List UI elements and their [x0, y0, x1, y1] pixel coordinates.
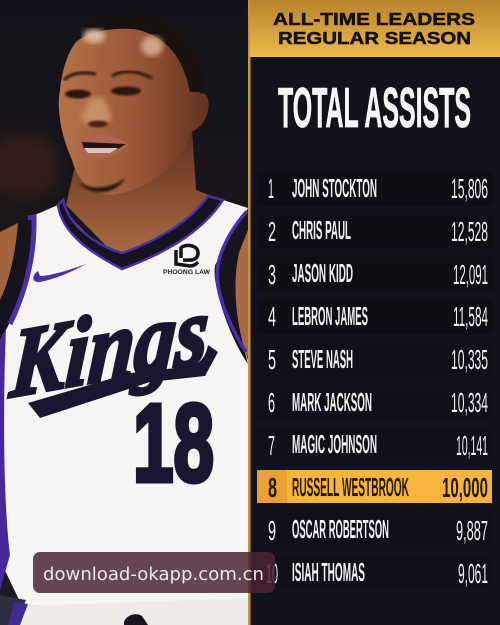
row 3 — [257, 257, 493, 291]
shorts — [14, 598, 248, 625]
nose — [80, 98, 112, 126]
jersey number 18: 18 — [133, 382, 214, 505]
row 6: 6 — [268, 387, 275, 418]
shorts logo — [124, 614, 148, 625]
player right arm — [232, 225, 250, 360]
watermark: download-okapp.com.cn — [43, 564, 264, 585]
row 3: 3 — [268, 259, 276, 290]
left side trim — [0, 328, 10, 590]
header banner: REGULAR SEASON — [278, 28, 471, 48]
goatee — [78, 178, 125, 192]
jersey collar — [58, 196, 223, 269]
player head — [59, 13, 209, 195]
right strap trim — [215, 210, 248, 364]
shorts waist trim — [0, 595, 26, 625]
kings wordmark: Kings — [7, 275, 212, 419]
left strap trim — [0, 217, 34, 342]
hair — [80, 13, 204, 92]
phoong law logo — [163, 245, 211, 276]
watermark — [33, 552, 275, 593]
row 2: CHRIS PAUL — [292, 215, 351, 245]
row 5 — [257, 343, 493, 377]
row 4: LEBRON JAMES — [292, 301, 368, 331]
phoong law logo: PHOONG LAW — [163, 269, 211, 276]
brows and eyes — [64, 72, 152, 80]
leaderboard — [257, 172, 493, 589]
row 8 highlighted: 8 — [268, 472, 277, 503]
nike swoosh — [33, 264, 86, 282]
mouth — [78, 134, 128, 158]
player left arm — [0, 222, 20, 340]
row 4: 4 — [268, 301, 276, 332]
row 2: 2 — [268, 216, 276, 247]
row 10: ISIAH THOMAS — [292, 557, 365, 587]
row 9: 9 — [268, 515, 276, 546]
player neck — [66, 130, 222, 262]
row 6: MARK JACKSON — [292, 387, 372, 417]
header banner — [250, 0, 500, 57]
jersey body — [0, 200, 248, 606]
arena background glow — [0, 133, 60, 197]
forehead shine — [83, 29, 105, 43]
row 2 — [257, 215, 493, 248]
row 5: STEVE NASH — [292, 344, 353, 374]
header banner: ALL-TIME LEADERS — [273, 9, 475, 29]
right panel background — [250, 0, 500, 625]
row 7: 7 — [268, 430, 275, 461]
photo panel: player — [0, 0, 250, 625]
row 5: 5 — [268, 344, 276, 375]
gold divider — [248, 0, 250, 625]
row 3: JASON KIDD — [292, 258, 353, 288]
row 10: 10 — [266, 558, 278, 589]
row 1: 1 — [268, 173, 274, 204]
